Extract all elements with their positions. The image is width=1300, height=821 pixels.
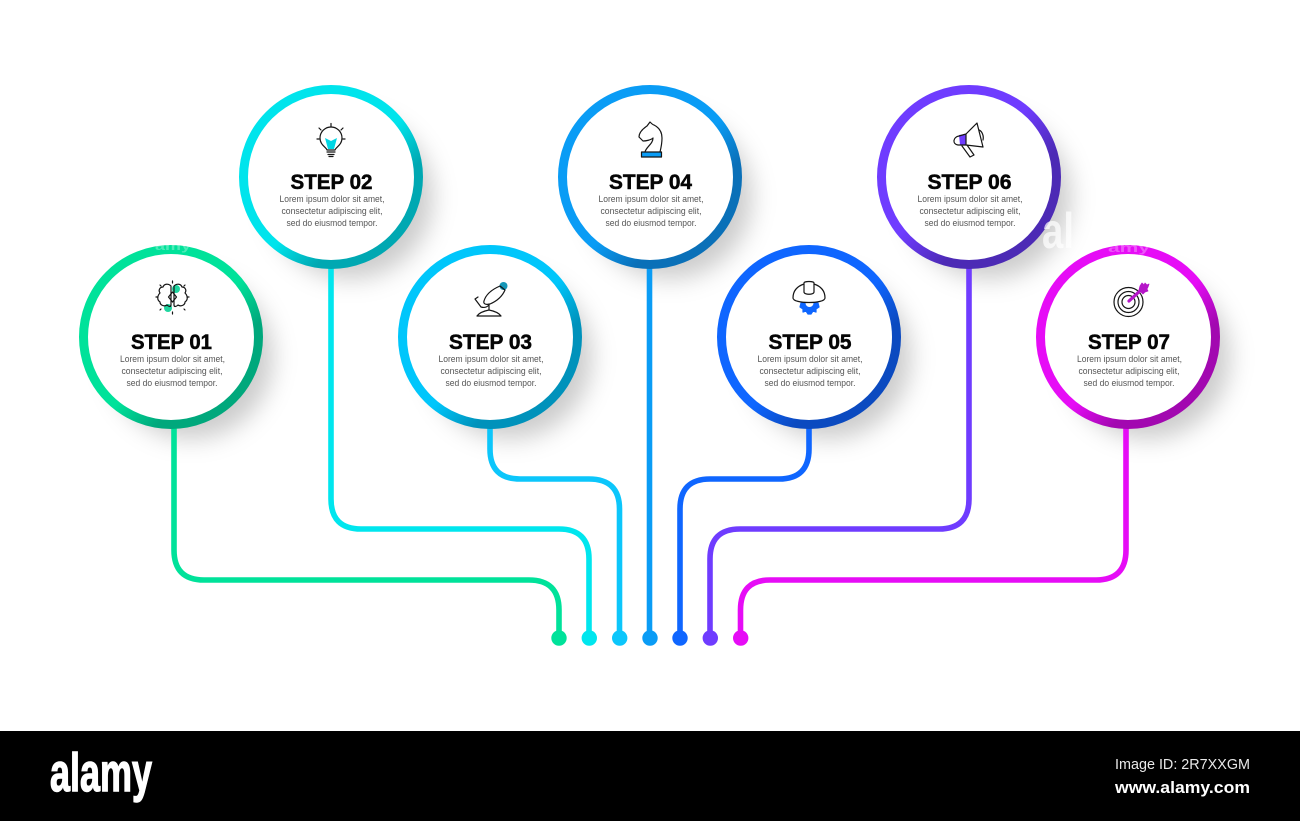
text block xyxy=(1077,354,1182,388)
connector: step 01 xyxy=(174,425,567,646)
text block: sed do eiusmod tempor. xyxy=(126,378,218,388)
heading: STEP 01 xyxy=(131,331,212,354)
text block: sed do eiusmod tempor. xyxy=(1084,378,1174,388)
text block: consectetur adipiscing elit, xyxy=(600,206,702,216)
icon: brain xyxy=(156,281,189,314)
watermark ghost: amy xyxy=(155,238,192,253)
connector: step 05 xyxy=(672,425,809,646)
watermark ghost xyxy=(155,203,1151,259)
image id: Image ID: 2R7XXGM xyxy=(1115,756,1250,773)
panel: step 03 xyxy=(402,250,578,424)
text block: sed do eiusmod tempor. xyxy=(764,378,856,388)
icon: target and arrow xyxy=(1114,283,1149,316)
panel: step 04 xyxy=(562,90,738,264)
text block xyxy=(280,194,384,228)
text block xyxy=(438,354,544,388)
text block: consectetur adipiscing elit, xyxy=(1078,366,1180,376)
website: www.alamy.com xyxy=(1114,778,1250,797)
text block: Lorem ipsum dolor sit amet, xyxy=(280,194,384,204)
icon: chess knight xyxy=(639,122,662,157)
icon: light bulb xyxy=(317,124,345,156)
text block: consectetur adipiscing elit, xyxy=(122,366,222,376)
heading: STEP 03 xyxy=(449,331,532,354)
text block xyxy=(598,194,704,228)
heading: STEP 04 xyxy=(609,171,692,194)
panel: step 01 xyxy=(84,250,258,424)
panel: step 07 xyxy=(1040,250,1216,424)
connector: step 02 xyxy=(331,265,597,646)
text block: Lorem ipsum dolor sit amet, xyxy=(598,194,704,204)
text block: Lorem ipsum dolor sit amet, xyxy=(1077,354,1182,364)
connector: step 06 xyxy=(703,265,969,646)
text block: sed do eiusmod tempor. xyxy=(286,218,378,228)
watermark ghost: amy xyxy=(1108,240,1151,255)
watermark ghost: al xyxy=(1042,203,1074,259)
text block: Lorem ipsum dolor sit amet, xyxy=(758,354,862,364)
text block xyxy=(120,354,225,388)
connector: step 07 xyxy=(733,425,1126,646)
icon: microscope xyxy=(475,282,508,316)
panel: step 02 xyxy=(244,90,418,264)
heading: STEP 06 xyxy=(928,171,1012,194)
panel: step 06 xyxy=(882,90,1056,264)
shadow: circle group xyxy=(109,115,1230,439)
panel: step 05 xyxy=(722,250,896,424)
icon: megaphone xyxy=(954,123,983,157)
text block: Lorem ipsum dolor sit amet, xyxy=(438,354,544,364)
text block: consectetur adipiscing elit, xyxy=(282,206,382,216)
footer logo: alamy xyxy=(50,743,152,803)
text block: sed do eiusmod tempor. xyxy=(606,218,696,228)
text block: Lorem ipsum dolor sit amet, xyxy=(918,194,1022,204)
text block xyxy=(758,354,862,388)
text block: sed do eiusmod tempor. xyxy=(924,218,1016,228)
text block: sed do eiusmod tempor. xyxy=(446,378,536,388)
text block xyxy=(918,194,1022,228)
text block: Lorem ipsum dolor sit amet, xyxy=(120,354,225,364)
heading: STEP 05 xyxy=(768,331,852,354)
connector: step 04 xyxy=(642,265,658,646)
heading: STEP 02 xyxy=(290,171,372,194)
heading: STEP 07 xyxy=(1088,331,1170,354)
connector: step 03 xyxy=(490,425,627,646)
text block: consectetur adipiscing elit, xyxy=(760,366,860,376)
text block: consectetur adipiscing elit, xyxy=(920,206,1020,216)
text block: consectetur adipiscing elit, xyxy=(440,366,542,376)
icon: helmet and gear xyxy=(793,282,825,314)
footer band xyxy=(0,731,1300,821)
